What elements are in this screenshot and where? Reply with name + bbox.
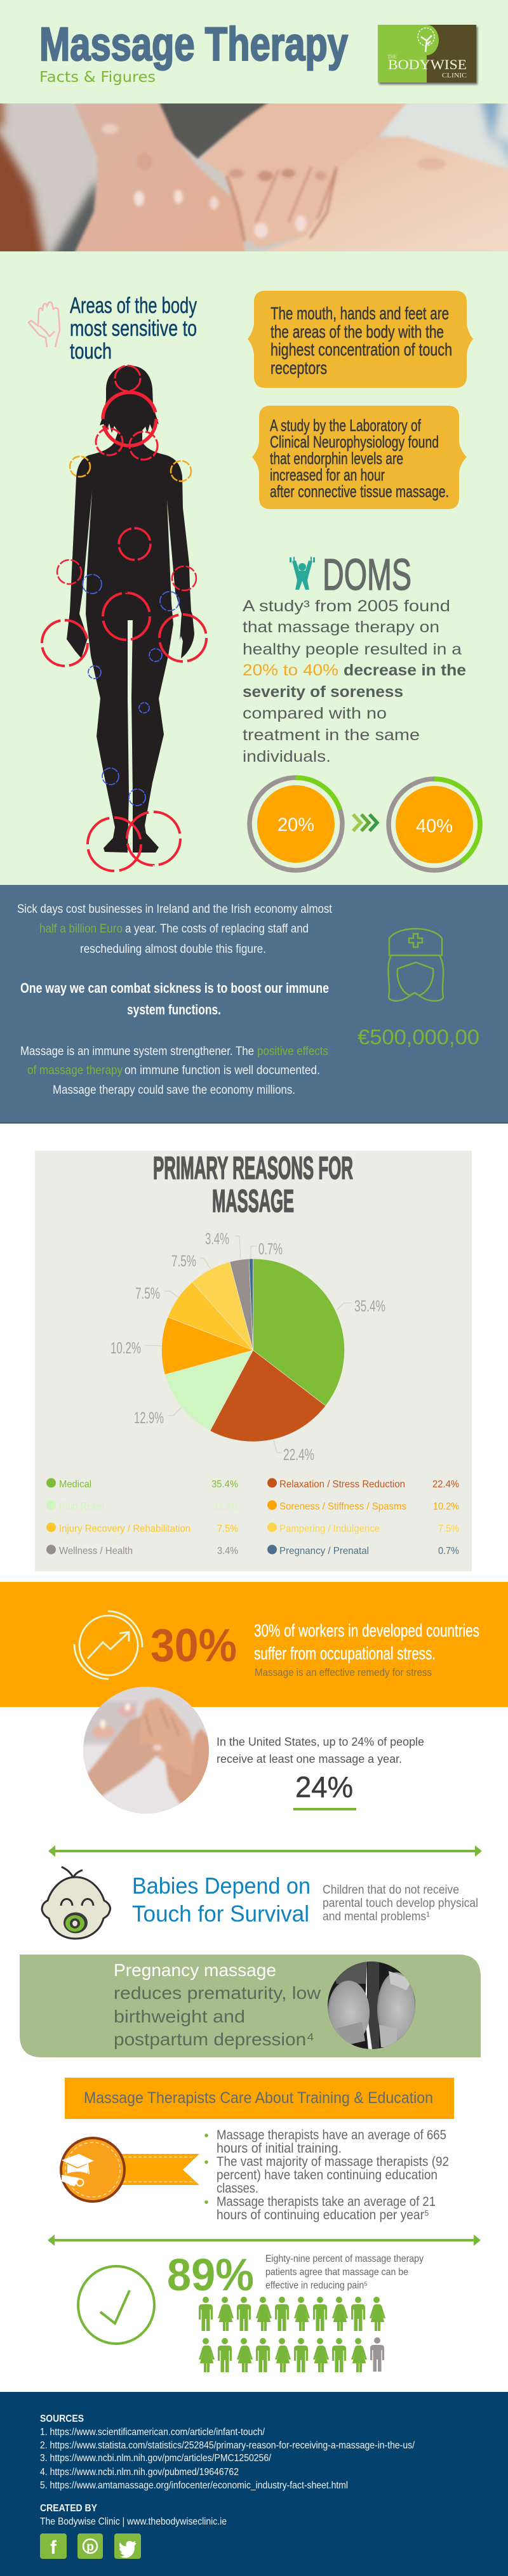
icon: baby bbox=[42, 1867, 110, 1939]
callout: touch receptors: The mouth, hands and feet are bbox=[271, 303, 449, 323]
panel header: training and education: Massage Therapists Care About Training & Education bbox=[84, 2089, 433, 2107]
chart legend: Pain Relief bbox=[59, 1501, 105, 1512]
chart legend: Medical bbox=[59, 1479, 91, 1490]
heading: areas of the body: touch bbox=[70, 339, 112, 364]
chart legend: 12.9% bbox=[214, 1501, 238, 1512]
figure: 30%: 30% bbox=[150, 1620, 237, 1671]
pie value labels: 10.2% bbox=[110, 1339, 141, 1357]
icon: weightlifter bbox=[290, 557, 315, 590]
text: sick days: Sick days cost businesses in Ireland and the Irish economy almost bbox=[17, 903, 333, 916]
heading: DOMS: DOMS bbox=[323, 550, 411, 599]
pictogram: people bbox=[199, 2297, 385, 2372]
text: sick days: Massage is an immune system strengthener. The bbox=[20, 1045, 254, 1058]
callout: endorphin study: that endorphin levels are bbox=[270, 449, 403, 468]
text: pregnancy massage bbox=[114, 1960, 321, 2049]
heading: babies bbox=[132, 1873, 311, 1927]
text: pregnancy massage: reduces prematurity, low bbox=[114, 1983, 321, 2003]
hand icon bbox=[29, 302, 60, 347]
text: DOMS study: 20% to 40% bbox=[243, 661, 338, 679]
icon: rising chart in circle bbox=[74, 1611, 142, 1679]
pie value labels bbox=[110, 1230, 385, 1464]
icon: facebook bbox=[40, 2533, 67, 2559]
chart legend: 35.4% bbox=[211, 1479, 238, 1490]
arrow: divider 2 bbox=[48, 2234, 481, 2246]
pie value labels: 35.4% bbox=[354, 1298, 385, 1315]
text: sick days: One way we can combat sickness is to boost our immune bbox=[20, 980, 329, 996]
credit: CREATED BY bbox=[40, 2503, 97, 2514]
icon: pinterest bbox=[77, 2533, 103, 2559]
icon: pinterest: p bbox=[86, 2540, 94, 2554]
text: parental touch bbox=[323, 1883, 478, 1923]
pie value labels: 3.4% bbox=[205, 1230, 229, 1248]
text: occupational stress bbox=[254, 1621, 479, 1663]
chart legend: 7.5% bbox=[217, 1524, 238, 1534]
title: Massage Therapy bbox=[39, 18, 348, 70]
text: sick days: positive effects bbox=[257, 1045, 328, 1058]
text: 24% of people: In the United States, up to 24% of people bbox=[217, 1736, 424, 1748]
panel: primary reasons chart bbox=[35, 1150, 472, 1571]
chart legend: 0.7% bbox=[438, 1546, 459, 1557]
chart legend: 22.4% bbox=[432, 1479, 459, 1490]
text: DOMS study: that massage therapy on bbox=[243, 618, 439, 636]
text: pregnancy massage: birthweight and bbox=[114, 2007, 245, 2026]
chart title bbox=[153, 1150, 353, 1219]
chart legend: Injury Recovery / Rehabilitation bbox=[59, 1524, 190, 1534]
text: reducing pain: Eighty-nine percent of massage therapy bbox=[265, 2254, 424, 2264]
photo: hands massaging a back bbox=[0, 103, 508, 251]
text: 24% of people bbox=[217, 1736, 424, 1765]
text: sick days: Massage therapy could save the economy millions. bbox=[53, 1084, 295, 1097]
arrow: triple chevrons bbox=[353, 814, 377, 831]
callout: touch receptors: the areas of the body with the bbox=[271, 322, 444, 342]
pie value labels: 0.7% bbox=[258, 1240, 283, 1258]
list: training facts: classes. bbox=[217, 2181, 258, 2196]
text: sick days: rescheduling almost double this figure. bbox=[80, 943, 266, 956]
text: reducing pain: patients agree that massage can be bbox=[265, 2267, 408, 2278]
sources: 3. https://www.ncbi.nlm.nih.gov/pmc/articles/PMC1250256/ bbox=[40, 2453, 271, 2464]
text: sick days: on immune function is well documented. bbox=[124, 1064, 320, 1077]
logo: The Bodywise Clinic: CLINIC bbox=[442, 72, 467, 79]
arrow: divider 1 bbox=[48, 1845, 482, 1857]
callout: endorphin study: increased for an hour bbox=[270, 465, 385, 484]
text: sick days: half a billion Euro bbox=[39, 922, 123, 936]
chart legend: Pregnancy / Prenatal bbox=[279, 1546, 369, 1557]
progress ring: 40% bbox=[389, 779, 480, 870]
photo: pregnant bellies bbox=[328, 1962, 415, 2049]
text: sick days: a year. The costs of replacing staff and bbox=[125, 922, 309, 936]
list: training facts: Massage therapists have an average of 665 bbox=[217, 2128, 446, 2142]
chart title: MASSAGE bbox=[212, 1183, 294, 1219]
logo: The Bodywise Clinic bbox=[378, 25, 476, 83]
text: reducing pain bbox=[265, 2254, 424, 2291]
text: parental touch: parental touch develop physical bbox=[323, 1897, 478, 1910]
icon: twitter bbox=[114, 2533, 141, 2559]
chart legend: 10.2% bbox=[433, 1501, 459, 1512]
icon: check mark in circle bbox=[78, 2266, 154, 2344]
callout: touch receptors: receptors bbox=[271, 358, 327, 378]
figure: 24%: 24% bbox=[295, 1770, 353, 1803]
panel: occupational stress bbox=[0, 1582, 508, 1707]
icon: graduation badge and ribbon bbox=[61, 2138, 199, 2201]
panel: pregnancy massage bbox=[20, 1955, 481, 2057]
text: DOMS study: severity of soreness bbox=[243, 683, 403, 701]
sources: 1. https://www.scientificamerican.com/article/infant-touch/ bbox=[40, 2427, 265, 2438]
heading: babies: Touch for Survival bbox=[132, 1901, 309, 1927]
text: effective remedy: Massage is an effective remedy for stress bbox=[255, 1666, 432, 1678]
pie value labels: 7.5% bbox=[171, 1252, 196, 1270]
chart legend: Pampering / Indulgence bbox=[279, 1524, 380, 1534]
text: sick days bbox=[17, 903, 333, 1097]
background: header and body section bbox=[0, 0, 508, 885]
heading: areas of the body bbox=[70, 293, 197, 364]
text: reducing pain: effective in reducing pain⁵ bbox=[265, 2280, 368, 2291]
callout: endorphin study: Clinical Neurophysiology found bbox=[270, 432, 439, 451]
text: DOMS study: treatment in the same bbox=[243, 726, 420, 744]
heading: areas of the body: Areas of the body bbox=[70, 293, 197, 318]
callout: endorphin study: after connective tissue massage. bbox=[270, 482, 449, 501]
credit bbox=[40, 2503, 227, 2527]
sources: 2. https://www.statista.com/statistics/252845/primary-reason-for-receiving-a-massage-in-the-us/ bbox=[40, 2440, 415, 2451]
logo: The Bodywise Clinic: BODYWISE bbox=[388, 56, 467, 72]
text: DOMS study bbox=[243, 597, 466, 766]
progress ring: 20%: 20% bbox=[277, 814, 314, 835]
panel: sick days cost bbox=[0, 885, 508, 1124]
progress ring: 20% bbox=[250, 778, 342, 870]
text: DOMS study: A study³ from 2005 found bbox=[243, 597, 450, 615]
chart legend: 3.4% bbox=[217, 1546, 238, 1557]
callout: touch receptors bbox=[248, 291, 473, 388]
figure: euro amount: €500,000,00 bbox=[358, 1025, 479, 1049]
footer bbox=[0, 2392, 508, 2576]
callout: endorphin study bbox=[252, 406, 467, 509]
list: training facts: Massage therapists take an average of 21 bbox=[217, 2194, 436, 2209]
sources: 5. https://www.amtamassage.org/infocenter/economic_industry-fact-sheet.html bbox=[40, 2480, 348, 2491]
pie value labels: 22.4% bbox=[283, 1446, 314, 1464]
progress ring: 40%: 40% bbox=[416, 816, 453, 837]
photo: foot massage bbox=[83, 1687, 209, 1814]
icon: nurse bbox=[388, 929, 443, 1001]
list: training facts bbox=[204, 2128, 449, 2222]
text: DOMS study: individuals. bbox=[243, 748, 331, 766]
panel header: training and education bbox=[65, 2078, 454, 2119]
pie value labels: 7.5% bbox=[135, 1285, 160, 1303]
callout: endorphin study: A study by the Laboratory of bbox=[270, 416, 422, 435]
text: pregnancy massage: postpartum depression⁴ bbox=[114, 2029, 314, 2049]
figure: 89%: 89% bbox=[167, 2250, 254, 2300]
text: pregnancy massage: Pregnancy massage bbox=[114, 1960, 276, 1980]
text: sick days: of massage therapy bbox=[27, 1064, 123, 1077]
sources bbox=[40, 2413, 415, 2491]
callout: touch receptors: highest concentration of touch bbox=[271, 340, 452, 359]
text: occupational stress: suffer from occupational stress. bbox=[254, 1643, 436, 1663]
text: sick days: system functions. bbox=[127, 1002, 221, 1018]
list: training facts: The vast majority of massage therapists (92 bbox=[217, 2154, 449, 2169]
heading: areas of the body: most sensitive to bbox=[70, 316, 197, 341]
text: DOMS study: decrease in the bbox=[344, 661, 466, 679]
text: 24% of people: receive at least one massage a year. bbox=[217, 1753, 402, 1765]
chart legend: 7.5% bbox=[438, 1524, 459, 1534]
chart legend: Wellness / Health bbox=[59, 1546, 133, 1557]
sources: 4. https://www.ncbi.nlm.nih.gov/pubmed/19646762 bbox=[40, 2467, 239, 2478]
credit: The Bodywise Clinic | www.thebodywiseclinic.ie bbox=[40, 2516, 227, 2527]
text: parental touch: Children that do not receive bbox=[323, 1883, 459, 1897]
pie chart bbox=[161, 1259, 345, 1442]
subtitle: Facts & Figures bbox=[39, 69, 156, 86]
text: parental touch: and mental problems¹ bbox=[323, 1910, 430, 1923]
chart legend: Soreness / Stiffness / Spasms bbox=[279, 1501, 406, 1512]
list: training facts: hours of continuing education per year⁵ bbox=[217, 2208, 429, 2222]
icon: facebook: f bbox=[50, 2537, 57, 2558]
heading: babies: Babies Depend on bbox=[132, 1873, 311, 1899]
chart legend: Relaxation / Stress Reduction bbox=[279, 1479, 405, 1490]
body silhouette with sensitivity rings bbox=[42, 366, 206, 871]
pie leader lines bbox=[145, 1236, 352, 1453]
list: training facts: hours of initial training. bbox=[217, 2141, 342, 2156]
list: training facts: percent) have taken continuing education bbox=[217, 2168, 438, 2182]
logo: The Bodywise Clinic: THE bbox=[387, 54, 397, 60]
pie value labels: 12.9% bbox=[134, 1409, 164, 1427]
text: DOMS study: compared with no bbox=[243, 705, 387, 722]
sources: SOURCES bbox=[40, 2413, 84, 2424]
chart legend bbox=[46, 1478, 459, 1557]
text: DOMS study: healthy people resulted in a bbox=[243, 641, 462, 658]
